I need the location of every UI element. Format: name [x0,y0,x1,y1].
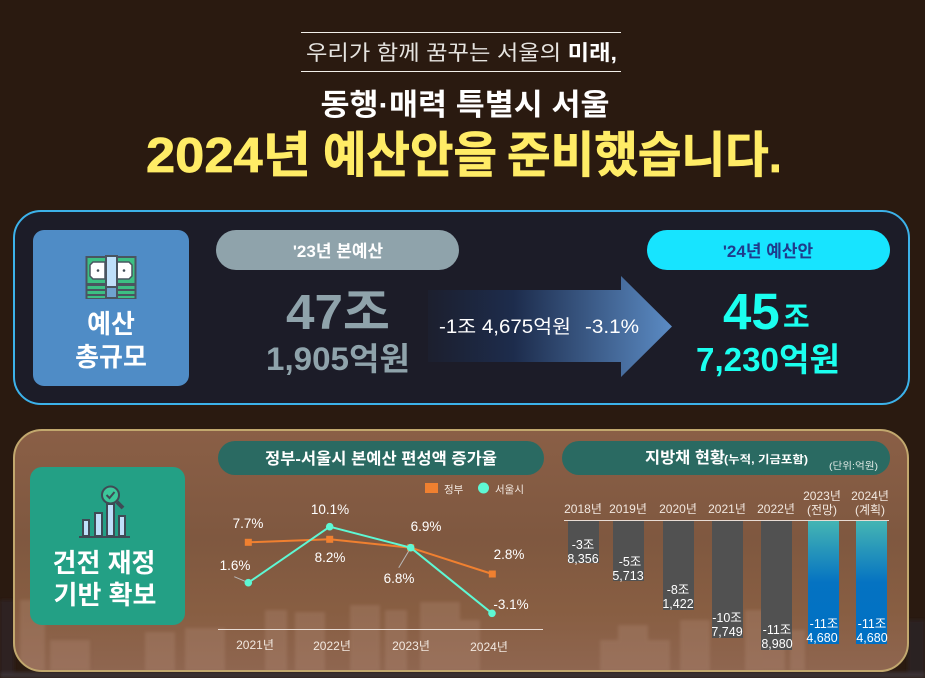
icon: bar chart and magnifier [79,486,130,538]
heading line 1: 동행·매력 특별시 서울 [320,89,610,122]
title block [146,32,782,183]
line chart: 2024년 [470,640,508,654]
heading line 2 [146,129,782,183]
line chart: 7.7% [233,516,263,531]
chart heading [562,441,890,475]
bar chart: 8,356 [567,552,599,566]
bar chart: 5,713 [612,569,644,583]
line chart: 2021년 [236,638,274,652]
chart heading: 지방채 현황 [645,449,725,467]
subtitle: 우리가 함께 꿈꾸는 서울의 미래, [306,42,617,65]
pill: 2023 budget: '23년 본예산 [293,242,383,261]
bar chart: 8,980 [761,637,793,651]
bar chart: -11조 [763,623,791,637]
bar chart: 7,749 [711,625,743,639]
pill: 2023 budget [216,230,459,270]
bar chart: -11조 [858,617,886,631]
pill: 2024 budget: '24년 예산안 [723,242,813,261]
line chart: 2023년 [392,639,430,653]
value: 2023 budget: 1,905억원 [266,341,410,377]
arrow: change: -1조 4,675억원 [439,316,571,338]
year labels: 2018년 [564,502,602,516]
year labels: 2023년 [803,489,841,503]
line chart: 1.6% [220,558,250,573]
line chart: 2.8% [494,547,524,562]
bar chart [567,521,888,651]
value: 2024 budget: 7,230억원 [696,341,840,378]
category box: budget [33,230,189,386]
heading line 2: 2024년 [146,129,311,183]
year labels: 2021년 [708,502,746,516]
heading line 2: 예산안을 [323,129,497,183]
category box: budget: 총규모 [75,342,147,372]
value: 2024 budget: 조 [783,302,810,334]
value: 2024 budget [696,283,840,378]
bar chart: 1,422 [662,597,694,611]
icon: money [86,255,136,299]
arrow: change [428,276,672,377]
line chart: 6.8% [384,571,414,586]
legend: 서울시 [495,484,524,496]
line chart: -3.1% [493,597,529,612]
year labels: (전망) [807,503,837,517]
chart panel: growth rate [218,441,544,654]
bar chart: -10조 [712,611,742,625]
category box: finances: 건전 재정 [53,548,155,578]
bar chart: 4,680 [856,631,888,645]
chart heading: (단위:억원) [829,460,878,472]
pill: 2024 budget [647,230,890,270]
bar chart: -3조 [572,538,594,552]
category box: finances: 기반 확보 [54,580,156,610]
city skyline backdrop [20,600,805,671]
category box: finances [30,467,185,625]
line chart: 6.9% [411,519,441,534]
line chart: 2022년 [313,639,351,653]
value: 2024 budget: 45 [723,283,780,340]
heading line 2: 준비했습니다. [507,129,782,183]
panel: sound finances [14,430,908,671]
bar chart: -5조 [619,555,641,569]
year labels: 2019년 [609,502,647,516]
year labels: 2024년 [851,489,889,503]
bar chart: -11조 [810,617,838,631]
arrow: change: -3.1% [585,317,639,338]
value: 2023 budget [266,286,410,377]
year labels: (계획) [855,503,885,517]
chart heading: 정부-서울시 본예산 편성액 증가율 [265,450,497,468]
chart heading [218,441,544,475]
chart panel: local bonds [562,441,890,651]
legend: 정부 [444,484,464,496]
legend [425,482,524,496]
chart heading: (누적, 기금포함) [724,452,808,466]
panel: budget total [14,211,909,404]
line chart: 8.2% [315,550,345,565]
year labels: 2020년 [659,502,697,516]
line chart [218,502,543,654]
year labels [564,489,889,517]
year labels: 2022년 [757,502,795,516]
bar chart: 4,680 [806,631,838,645]
category box: budget: 예산 [87,309,135,339]
value: 2023 budget: 47조 [286,286,390,340]
bar chart: -8조 [667,583,689,597]
line chart: 10.1% [311,502,349,517]
